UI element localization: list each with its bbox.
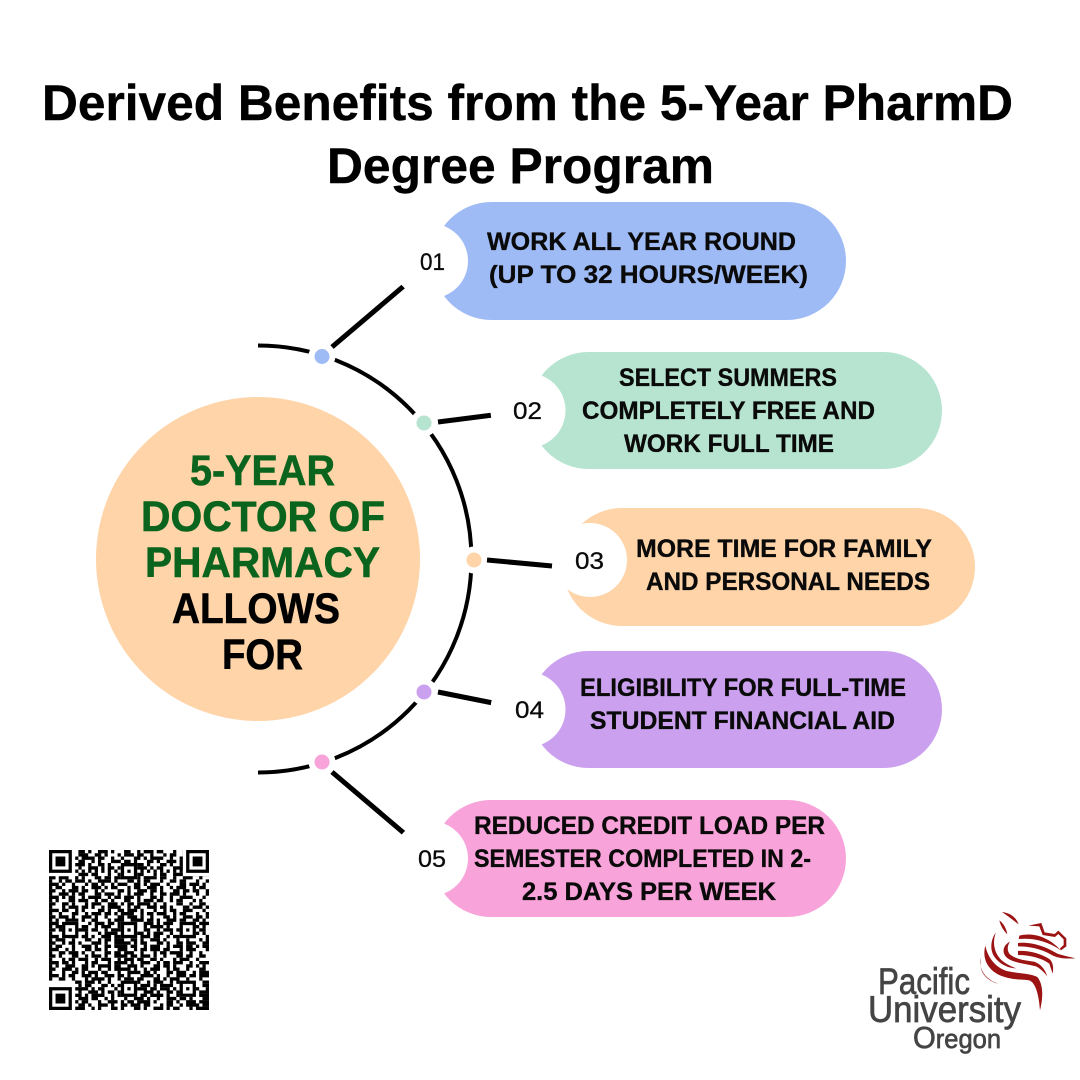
item 05: 05: [418, 846, 446, 873]
connector arc with nodes: [258, 342, 488, 776]
item 05: REDUCED CREDIT LOAD PER: [474, 812, 825, 840]
item 05: 2.5 DAYS PER WEEK: [522, 878, 776, 906]
central circle: ALLOWS: [172, 585, 340, 633]
central circle: 5-YEAR: [190, 447, 335, 495]
item 02: SELECT SUMMERS: [619, 364, 837, 392]
title: [42, 75, 1013, 194]
item 04: ELIGIBILITY FOR FULL-TIME: [580, 674, 906, 702]
logo dragon emblem: [980, 912, 1075, 1010]
item 01: 01: [420, 249, 445, 276]
item 03: 03: [575, 548, 604, 575]
item 02: 02: [513, 398, 542, 425]
central circle: [96, 397, 420, 721]
logo: Pacific University Oregon: University: [868, 989, 1021, 1030]
item 01: (UP TO 32 HOURS/WEEK): [489, 261, 808, 289]
central circle: PHARMACY: [145, 539, 380, 587]
item 04: 04: [515, 697, 544, 724]
item 04: STUDENT FINANCIAL AID: [590, 707, 895, 735]
logo: Pacific University Oregon: Oregon: [913, 1020, 1001, 1055]
item 03: MORE TIME FOR FAMILY: [636, 535, 932, 563]
item 05: SEMESTER COMPLETED IN 2-: [474, 845, 811, 873]
item 05: [393, 800, 846, 917]
connector lines: [332, 285, 552, 834]
logo: Pacific University Oregon: Pacific: [878, 961, 970, 1002]
item 03: [553, 508, 975, 626]
item 01: WORK ALL YEAR ROUND: [487, 228, 796, 256]
central circle: FOR: [222, 631, 303, 679]
central circle: DOCTOR OF: [141, 493, 385, 541]
item 02: COMPLETELY FREE AND: [582, 397, 875, 425]
item 03: AND PERSONAL NEEDS: [646, 568, 930, 596]
item 02: WORK FULL TIME: [624, 430, 834, 458]
item 01: [393, 202, 846, 320]
item 02: [490, 352, 942, 469]
item 04: [490, 651, 942, 768]
logo: Pacific University Oregon: [868, 912, 1075, 1055]
title: Derived Benefits from the 5-Year PharmD: [42, 75, 1013, 131]
title: Degree Program: [327, 138, 714, 194]
QR code: [49, 850, 209, 1010]
